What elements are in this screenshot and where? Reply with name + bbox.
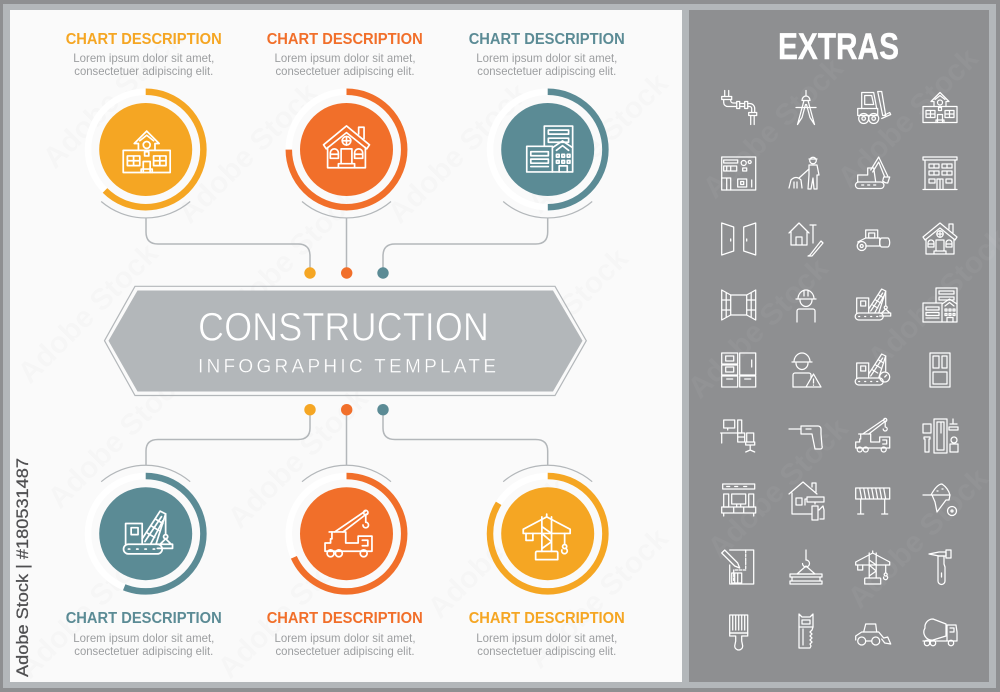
text block 4: consectetuer adipiscing elit. (74, 644, 213, 658)
watermark on main panel: Adobe Stock (12, 532, 165, 685)
watermark on extras panel (682, 42, 1000, 615)
chart 4: crawler crane (88, 465, 203, 591)
text block 2: consectetuer adipiscing elit. (276, 64, 414, 78)
icon: hand saw (799, 614, 813, 648)
text block 1 (66, 31, 222, 78)
icon: bathroom fittings (923, 419, 958, 453)
text block 4: CHART DESCRIPTION (66, 610, 222, 627)
text block 6: Lorem ipsum dolor sit amet, (476, 631, 617, 645)
text block 5: Lorem ipsum dolor sit amet, (274, 631, 416, 645)
watermark on main panel: Adobe Stock (482, 242, 635, 395)
watermark on main panel: Adobe Stock (382, 77, 535, 230)
text block 3: CHART DESCRIPTION (469, 31, 625, 48)
icon: double doors (722, 223, 756, 255)
text block 2: CHART DESCRIPTION (267, 31, 423, 48)
text block 1: Lorem ipsum dolor sit amet, (73, 51, 214, 65)
icon: office buildings (923, 288, 957, 322)
icon grid: extras (721, 90, 958, 650)
icon: house with chimney (923, 223, 957, 254)
chart 1: school (88, 92, 203, 218)
icon: excavator (855, 157, 890, 188)
icon: wheelbarrow (923, 484, 956, 516)
icon: blueprint and pencil (722, 550, 754, 584)
chart 6: tower crane (490, 465, 605, 591)
icon: road roller (857, 230, 890, 250)
chart 5: truck crane (289, 465, 404, 591)
icon: computer desk (721, 420, 755, 452)
icon: tower crane (856, 551, 890, 584)
text block 3 (469, 31, 625, 78)
text block 3: Lorem ipsum dolor sit amet, (476, 51, 617, 65)
text block 5: consectetuer adipiscing elit. (276, 644, 414, 658)
icon: worker with helmet (796, 290, 816, 322)
icon: apartment building (923, 157, 957, 190)
icon: hammer (929, 550, 951, 584)
watermark on main panel: Adobe Stock (522, 67, 675, 220)
icon: forklift (858, 92, 891, 124)
icon: kitchen cabinets (722, 353, 756, 387)
text block 2 (267, 31, 423, 78)
chart 3: office buildings (490, 92, 605, 218)
icon: crawler crane (855, 289, 891, 320)
watermark on extras panel: Adobe Stock (842, 462, 995, 615)
icon: open window (722, 290, 756, 320)
icon: concrete mixer truck (923, 619, 957, 646)
icon: floor plan (722, 157, 756, 190)
watermark on extras panel: Adobe Stock (697, 52, 850, 205)
text block 5 (267, 610, 423, 658)
subtitle: INFOGRAPHIC TEMPLATE (198, 357, 496, 378)
icon: worker with warning sign (792, 353, 821, 387)
watermark on extras panel: Adobe Stock (702, 412, 855, 565)
icon: drafting compass (796, 90, 816, 124)
watermark on main panel: Adobe Stock (37, 22, 190, 175)
icon: truck crane (856, 418, 890, 452)
panel: main infographic (10, 10, 682, 682)
icon: wheel loader (856, 624, 891, 645)
icon: house painting (789, 482, 824, 520)
connector lines: top (146, 218, 548, 273)
text block 6: CHART DESCRIPTION (469, 610, 625, 627)
watermark on extras panel: Adobe Stock (682, 252, 835, 405)
text block 1: CHART DESCRIPTION (66, 31, 222, 48)
watermark on main panel: Adobe Stock (222, 382, 375, 535)
icon: wrecking ball crane (855, 354, 890, 385)
watermark on main panel (12, 22, 675, 685)
connector lines: bottom (146, 410, 548, 465)
watermark on extras panel: Adobe Stock (832, 42, 985, 195)
connector dots: bottom (304, 404, 389, 415)
text block 2: Lorem ipsum dolor sit amet, (274, 51, 416, 65)
text block 1: consectetuer adipiscing elit. (74, 64, 213, 78)
watermark on main panel: Adobe Stock (422, 472, 575, 625)
connector dots: top (304, 267, 389, 279)
stock id label: Adobe Stock | #180531487 (13, 458, 32, 677)
central hexagon banner (104, 286, 586, 396)
icon: door (930, 353, 950, 387)
panel: extras (689, 10, 989, 682)
text block 5: CHART DESCRIPTION (267, 610, 423, 627)
watermark on main panel: Adobe Stock (12, 237, 165, 390)
title: CONSTRUCTION (198, 306, 489, 350)
icon: pipe (722, 90, 757, 124)
text block 4: Lorem ipsum dolor sit amet, (73, 631, 214, 645)
watermark on main panel: Adobe Stock (172, 77, 325, 230)
icon: power drill (789, 426, 822, 449)
icon: school (923, 92, 957, 122)
text block 6 (469, 610, 625, 658)
icon: house plan with pencil (789, 223, 823, 256)
extras heading: EXTRAS (778, 26, 899, 67)
text block 3: consectetuer adipiscing elit. (477, 64, 616, 78)
chart 2: house (289, 92, 404, 218)
icon: road barrier (856, 488, 890, 514)
icon: tv unit (722, 484, 756, 516)
icon: hook with beam (790, 550, 822, 584)
watermark on main panel: Adobe Stock (212, 532, 365, 685)
watermark on main panel: Adobe Stock (522, 522, 675, 675)
text block 4 (66, 610, 222, 658)
icon: worker digging (789, 157, 819, 189)
icon: paint brush (730, 615, 748, 650)
text block 6: consectetuer adipiscing elit. (477, 644, 616, 658)
watermark on main panel: Adobe Stock (212, 182, 365, 335)
watermark on main panel: Adobe Stock (42, 362, 195, 515)
